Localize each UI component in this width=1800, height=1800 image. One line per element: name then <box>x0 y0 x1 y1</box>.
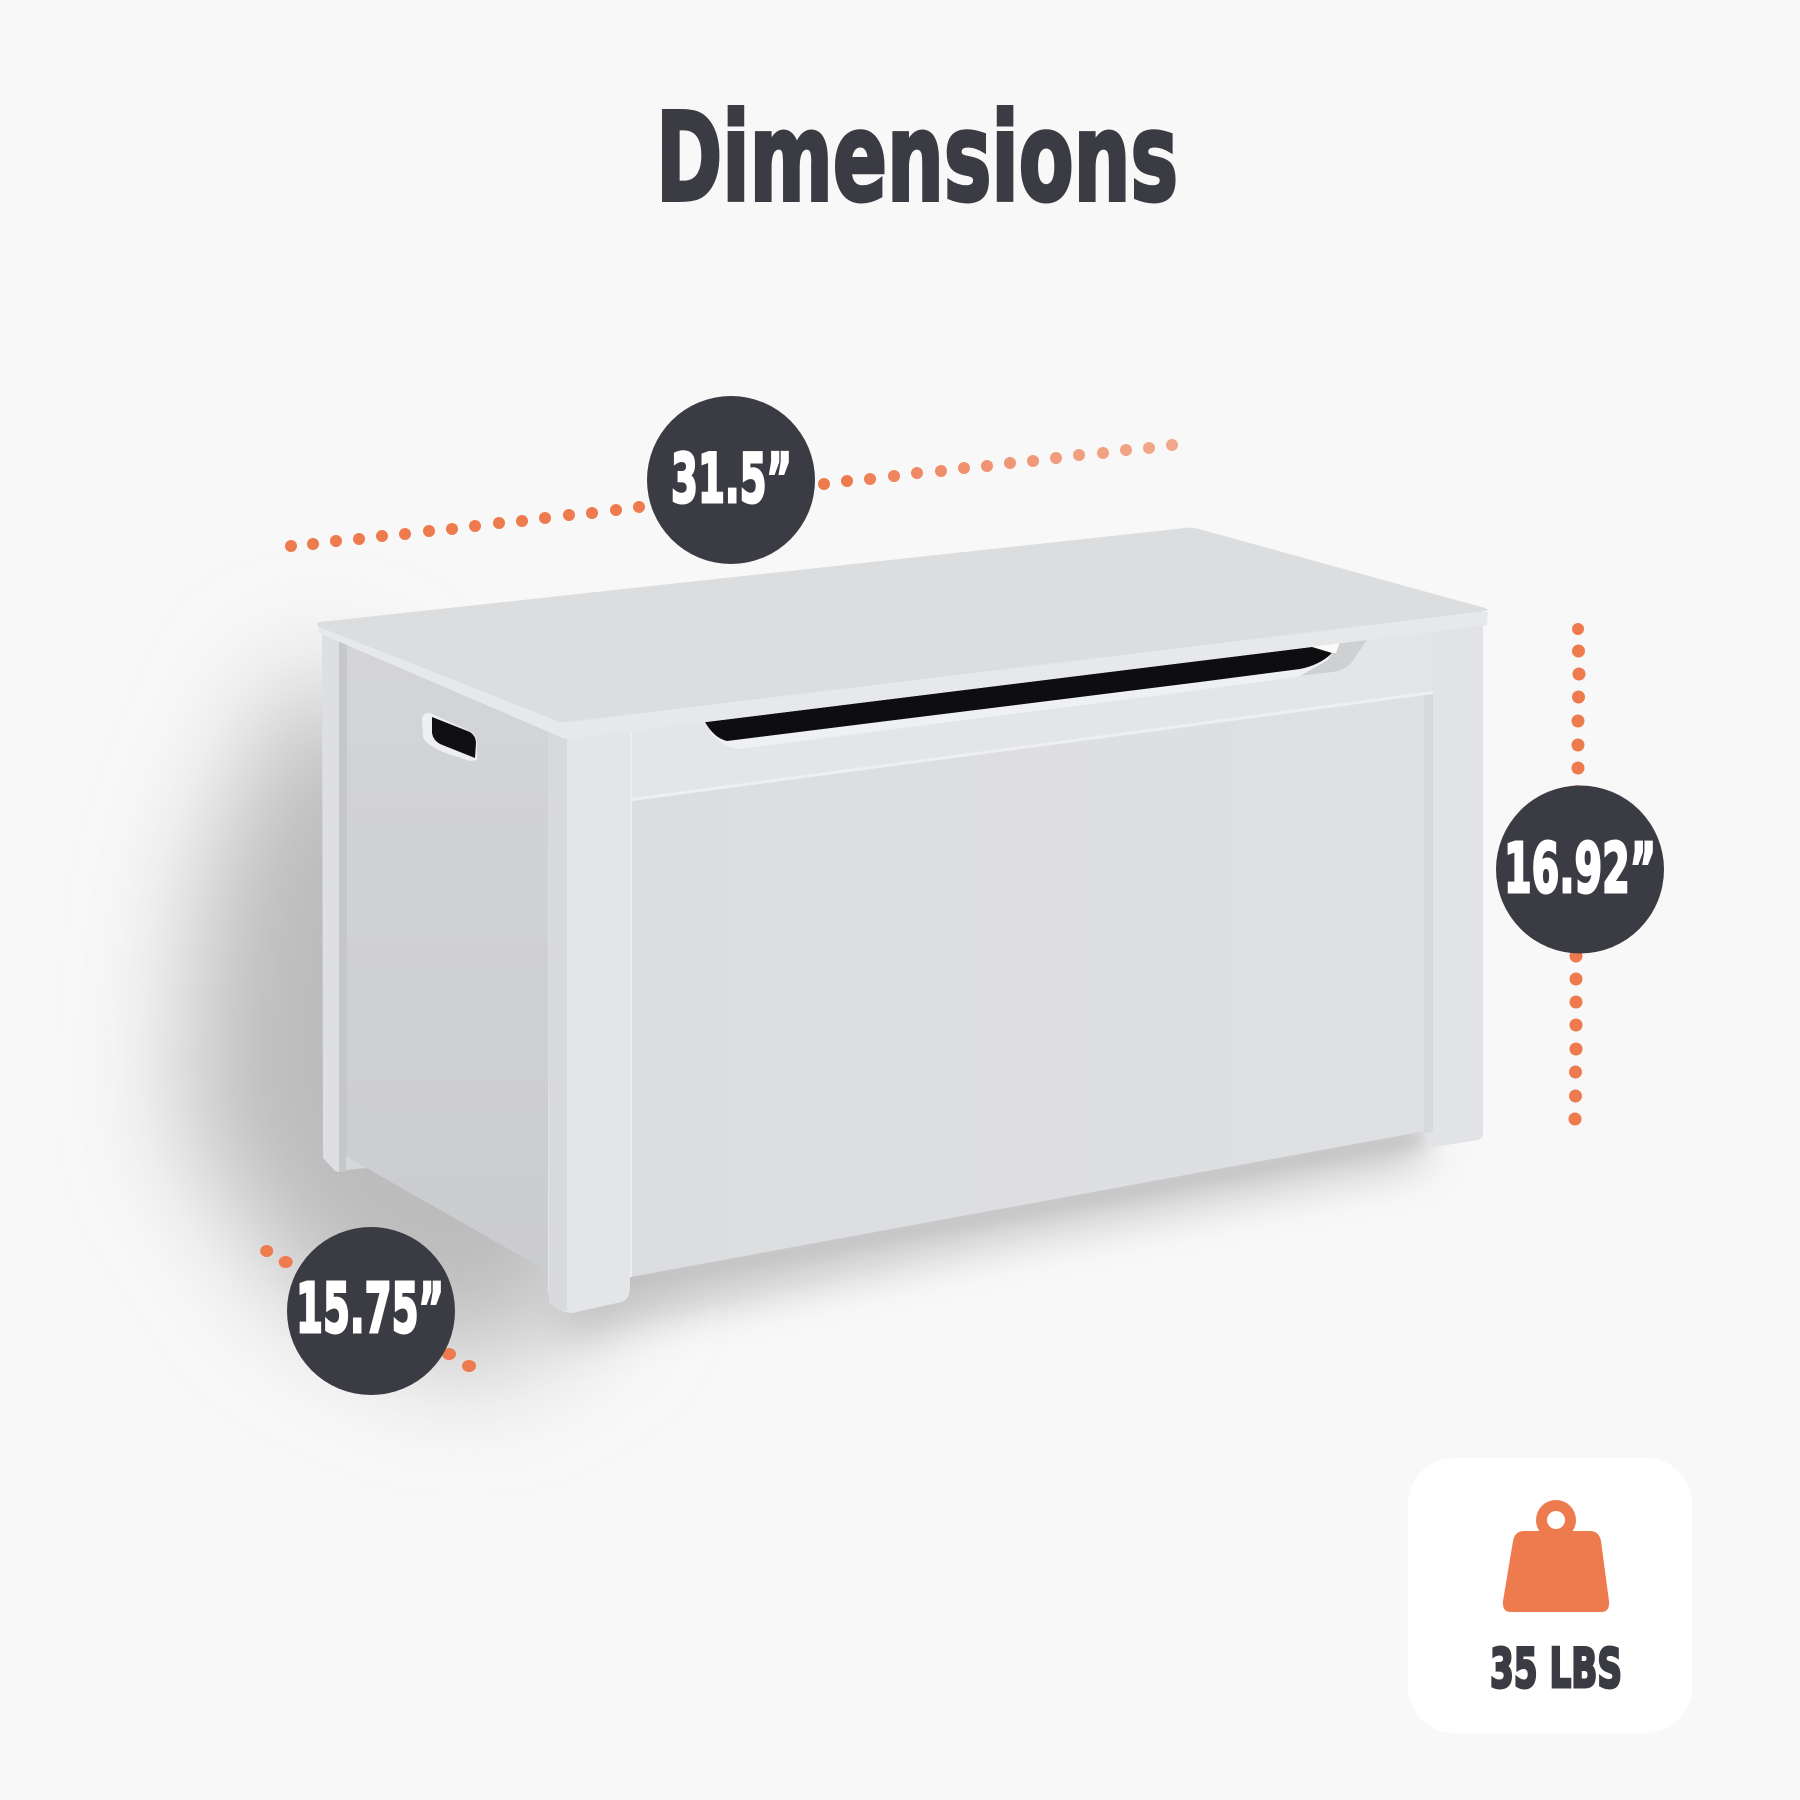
left front leg <box>548 725 630 1313</box>
badge <box>647 396 815 564</box>
panel: weight card <box>1408 1458 1692 1733</box>
value: 15.75” <box>296 1269 444 1349</box>
right front leg <box>1424 610 1483 1147</box>
dimension: depth 15.75 <box>260 1227 476 1395</box>
product: white storage chest <box>185 528 1488 1375</box>
icon: weight <box>1503 1500 1609 1612</box>
badge <box>1496 786 1664 954</box>
value: 31.5” <box>671 440 792 519</box>
lid <box>317 528 1488 739</box>
side handle cutout <box>422 713 477 761</box>
value: 16.92” <box>1504 829 1656 909</box>
handle slot <box>705 640 1367 749</box>
side panel <box>347 630 549 1272</box>
dotted line <box>260 1245 476 1372</box>
weight label: 35 LBS <box>1490 1637 1622 1700</box>
badge <box>287 1227 455 1395</box>
title: Dimensions <box>656 87 1178 229</box>
cast shadow <box>185 680 1425 1375</box>
dotted line <box>285 439 1178 552</box>
front panel <box>630 610 1425 1277</box>
dimension: width 31.5 <box>285 396 1178 564</box>
dimension: height 16.92 <box>1496 623 1664 1126</box>
back left leg <box>322 632 339 1172</box>
dotted line <box>1568 623 1586 1126</box>
lid rail <box>632 620 1433 800</box>
